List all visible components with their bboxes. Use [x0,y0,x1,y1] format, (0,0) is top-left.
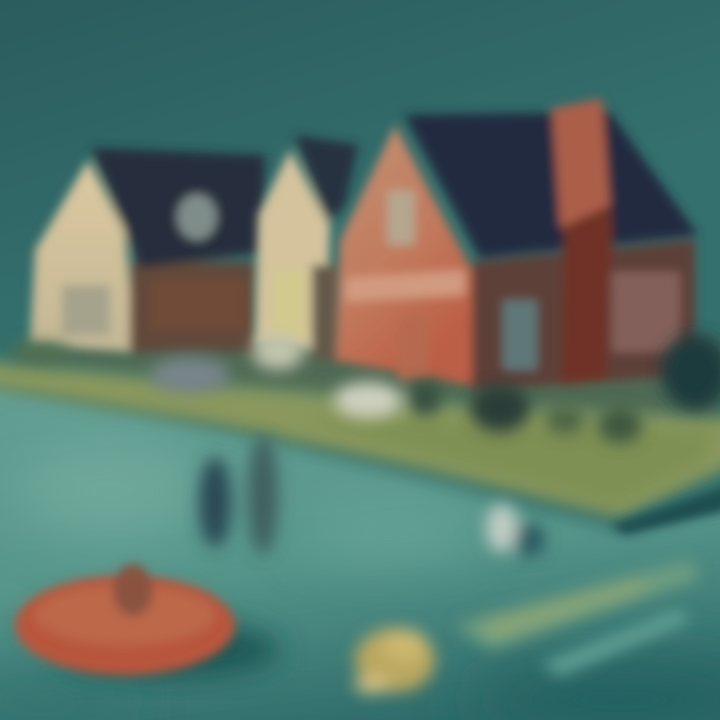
house: left cream [30,148,265,352]
bushes and garden [10,334,720,443]
yellow object [354,628,435,693]
left house roof [92,148,265,268]
left house wall [30,160,135,352]
ground under houses [20,340,720,420]
water foreground [0,380,720,720]
water highlights [0,440,720,720]
house: middle cream [255,135,358,360]
left house window [62,285,110,335]
house: right brick [335,98,698,390]
lawn edge shadow [610,485,720,535]
right windows [612,272,680,352]
side window [503,300,537,370]
document on the water [455,560,700,675]
red boat shadow [60,622,280,678]
left house dormer [177,194,217,240]
door [398,315,428,380]
brown side wall [472,240,695,390]
small white object [486,504,545,557]
chimney [556,98,612,385]
left house lower brown [130,262,255,352]
red boat [15,564,235,675]
lawn [0,360,720,518]
gable window [387,190,415,245]
roof [405,112,698,258]
band [345,270,465,302]
figures [199,435,278,555]
brick gable [335,125,472,385]
